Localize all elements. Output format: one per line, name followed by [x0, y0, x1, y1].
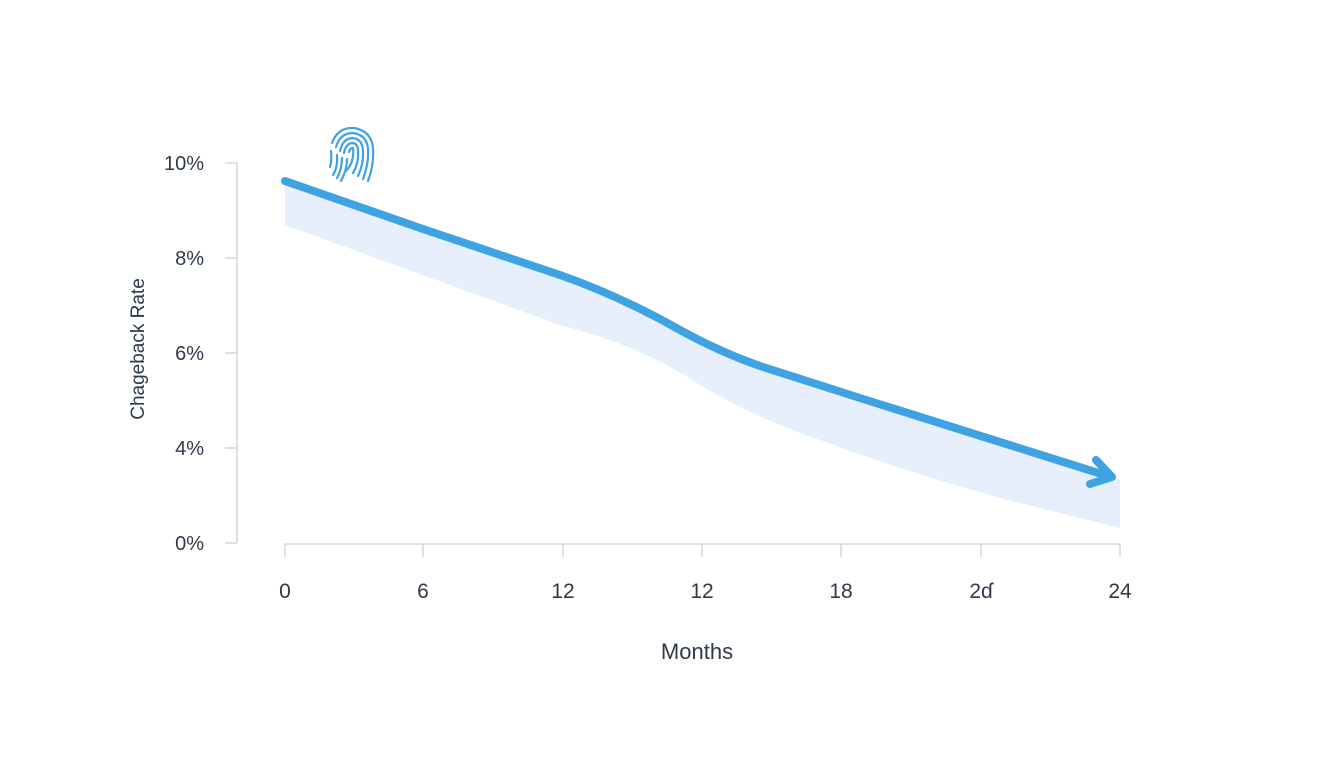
- x tick labels: 24: [1108, 580, 1132, 603]
- y axis: [225, 163, 237, 543]
- x axis title: Months: [661, 639, 733, 664]
- icon: fingerprint: [330, 128, 373, 181]
- x tick labels: 12: [551, 580, 575, 603]
- y axis title: Chageback Rate: [128, 278, 149, 420]
- y tick labels: [164, 153, 204, 555]
- x tick labels: 2ɗ: [969, 580, 994, 603]
- y tick labels: 0%: [175, 533, 204, 555]
- x tick labels: [279, 580, 1132, 603]
- y tick labels: 6%: [175, 343, 204, 365]
- trend line arrow: [285, 181, 1112, 484]
- x tick labels: 12: [690, 580, 714, 603]
- y tick labels: 8%: [175, 248, 204, 270]
- x axis: [285, 544, 1120, 557]
- x tick labels: 0: [279, 580, 291, 603]
- y tick labels: 10%: [164, 153, 204, 175]
- x tick labels: 18: [829, 580, 853, 603]
- confidence band: [285, 181, 1120, 528]
- y tick labels: 4%: [175, 438, 204, 460]
- x tick labels: 6: [417, 580, 429, 603]
